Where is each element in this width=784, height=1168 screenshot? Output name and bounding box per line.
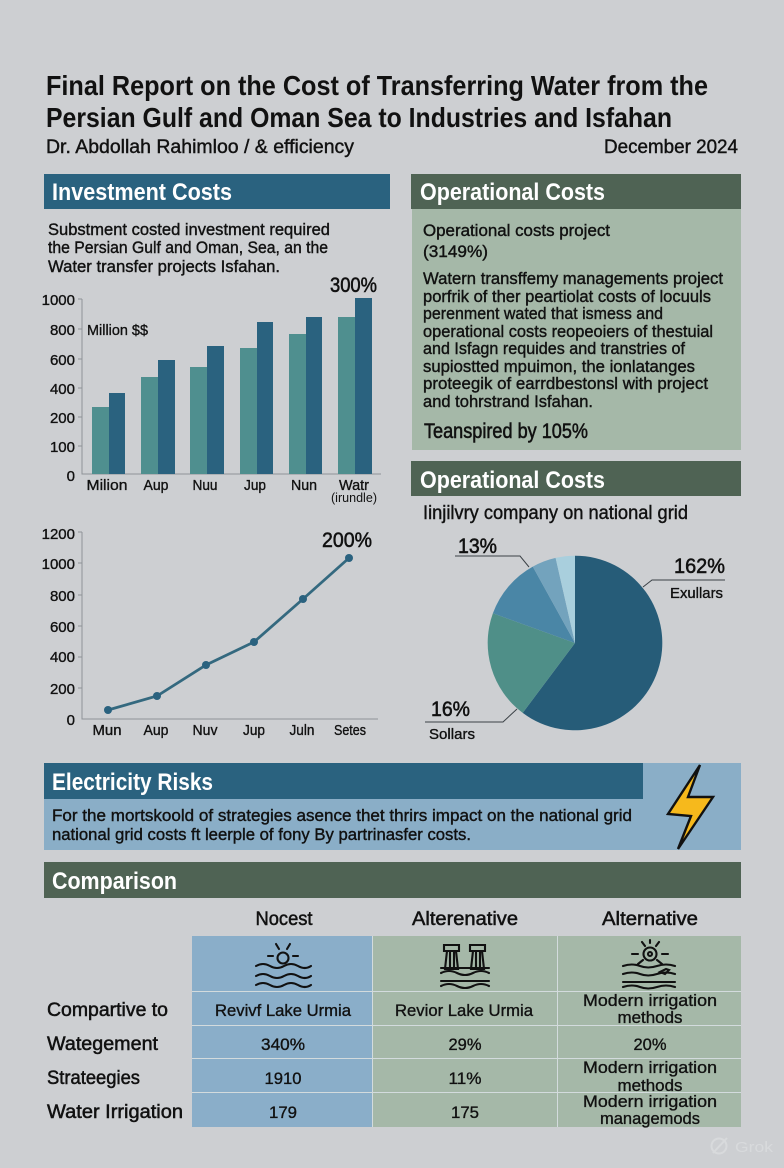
line chart: 1200 <box>42 526 75 543</box>
row labels: Water Irrigation <box>47 1102 183 1123</box>
electricity risks text: For the mortskoold of strategies asence thet thrirs impact on the national grid <box>52 806 632 825</box>
cell values <box>215 991 717 1128</box>
cell values: Revivf Lake Urmia <box>215 1001 352 1020</box>
pie chart subtitle: Iinjilvry company on national grid <box>423 503 688 524</box>
pie chart: 13% <box>458 535 497 558</box>
row labels: Strateegies <box>47 1068 140 1089</box>
operational body text: Watern transffemy managements project <box>423 269 723 288</box>
bar chart: 800 <box>50 322 75 339</box>
investment description: the Persian Gulf and Oman, Sea, an the <box>48 238 328 257</box>
operational body text: supiostted mpuimon, the ionlatanges <box>423 357 695 376</box>
table cells <box>192 936 741 1127</box>
panel: electricity risks <box>44 763 741 850</box>
bar chart: 200 <box>50 410 75 427</box>
comparison header <box>44 862 741 898</box>
cell values: 11% <box>448 1069 482 1088</box>
operational intro: Operational costs project <box>423 221 610 240</box>
bar chart: Milion <box>86 477 128 494</box>
cell values: 340% <box>261 1035 305 1054</box>
row labels: Compartive to <box>47 1000 168 1021</box>
bar chart: 100 <box>50 439 75 456</box>
line chart: 1000 <box>42 556 75 573</box>
line chart: 600 <box>50 619 75 636</box>
pie chart: 16% <box>431 698 470 721</box>
bar chart: Million $$ <box>87 322 149 339</box>
investment description: Water transfer projects Isfahan. <box>48 257 280 276</box>
operational body text: operational costs reopeoiers of thestuial <box>423 322 713 341</box>
electricity risks text <box>52 806 632 844</box>
pie chart: 162% <box>674 555 725 578</box>
panel: operational costs <box>411 174 741 450</box>
line chart: 200 <box>50 681 75 698</box>
author line: Dr. Abdollah Rahimloo / & efficiency <box>46 137 354 158</box>
bar chart: (irundle) <box>331 490 377 505</box>
cell values: Revior Lake Urmia <box>395 1001 534 1020</box>
bar chart: 0 <box>67 468 75 485</box>
watermark: Grok <box>735 1139 774 1156</box>
bar chart: 300% <box>330 274 377 297</box>
line chart: 400 <box>50 649 75 666</box>
bar chart: 1000 <box>42 292 75 309</box>
pie chart: Sollars <box>429 726 475 743</box>
panel: investment costs header <box>44 174 390 209</box>
line chart: 200% <box>322 529 372 552</box>
row labels <box>47 1000 183 1123</box>
icon: sun and boat over water <box>623 940 675 988</box>
icon: sun over water <box>256 944 311 987</box>
bar chart: Nun <box>291 477 317 494</box>
operational body text: and Isfagn requides and transtries of <box>423 339 685 358</box>
date: December 2024 <box>604 137 738 158</box>
panel: investment costs header: Investment Costs <box>52 179 232 206</box>
line chart: 0 <box>67 712 75 729</box>
electricity risks text: national grid costs ft leerple of fony By partrinasfer costs. <box>52 825 471 844</box>
cell values: 175 <box>451 1103 479 1122</box>
electricity risks header: Electricity Risks <box>52 769 213 796</box>
second operational costs header <box>411 461 741 496</box>
second operational costs header: Operational Costs <box>420 467 605 494</box>
line chart: Setes <box>334 722 366 739</box>
icon: lightning bolt <box>668 765 713 849</box>
bar chart: 400 <box>50 381 75 398</box>
column headings: Alterenative <box>412 909 518 930</box>
operational intro <box>423 221 610 261</box>
operational body text: proteegik of earrdbestonsl with project <box>423 374 708 393</box>
operational body text: and tohrstrand Isfahan. <box>423 392 593 411</box>
cell values: 179 <box>269 1103 297 1122</box>
line chart: Nuv <box>192 722 218 739</box>
cell values: Modern irrigation <box>583 1058 717 1077</box>
cell values: methods <box>618 1008 682 1027</box>
column headings: Alternative <box>602 909 698 930</box>
operational costs header <box>411 174 741 209</box>
line chart: Mun <box>92 722 122 739</box>
cell values: Modern irrigation <box>583 991 717 1010</box>
title <box>46 70 708 133</box>
investment description <box>48 220 330 276</box>
operational body text <box>423 269 723 411</box>
line chart: Aup <box>144 722 168 739</box>
operational costs header: Operational Costs <box>420 179 605 206</box>
cell values: 20% <box>634 1035 666 1054</box>
cell values: Modern irrigation <box>583 1092 717 1111</box>
column headings <box>256 909 698 930</box>
cell values: 29% <box>448 1035 482 1054</box>
bar chart: Watr <box>339 477 369 494</box>
pie chart: Exullars <box>670 585 723 602</box>
investment description: Substment costed investment required <box>48 220 330 239</box>
line chart: Juln <box>290 722 314 739</box>
operational body text: porfrik of ther peartiolat costs of locuuls <box>423 287 711 306</box>
line chart <box>42 526 378 739</box>
bar chart: Nuu <box>192 477 218 494</box>
electricity risks header <box>44 763 643 799</box>
line chart: 800 <box>50 588 75 605</box>
pie chart <box>425 535 725 743</box>
title: Final Report on the Cost of Transferring Water from the <box>46 70 708 101</box>
bar chart: 600 <box>50 352 75 369</box>
operational body text: perenment wated that ismess and <box>423 304 663 323</box>
bar chart: Jup <box>244 477 266 494</box>
comparison header: Comparison <box>52 868 177 895</box>
comparison table <box>47 909 741 1128</box>
title: Persian Gulf and Oman Sea to Industries and Isfahan <box>46 102 672 133</box>
cell values: managemods <box>600 1109 700 1128</box>
bar chart <box>42 274 381 505</box>
column headings: Nocest <box>256 909 313 930</box>
operational callout: Teanspired by 105% <box>424 420 588 443</box>
cell values: 1910 <box>264 1069 302 1088</box>
line chart: Jup <box>243 722 265 739</box>
operational intro: (3149%) <box>423 242 488 261</box>
icon: dam towers over water <box>441 945 489 988</box>
watermark <box>712 1138 774 1156</box>
cell values: methods <box>618 1076 682 1095</box>
bar chart: Aup <box>144 477 168 494</box>
row labels: Wategement <box>47 1034 159 1055</box>
